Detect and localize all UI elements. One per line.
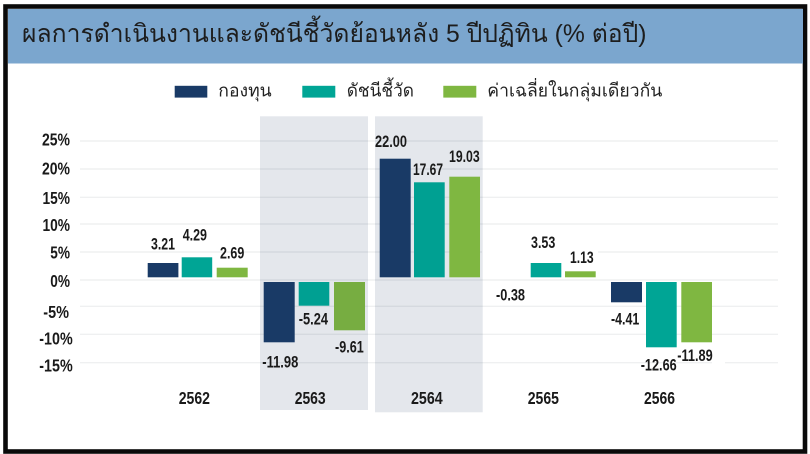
title: ผลการดำเนินงานและดัชนีชี้วัดย้อนหลัง 5 ปีปฏิทิน (% ต่อปี) (22, 15, 646, 48)
group 2564 (375, 133, 480, 408)
legend: peer average: ค่าเฉลี่ยในกลุ่มเดียวกัน (487, 78, 662, 102)
y axis labels (39, 130, 73, 376)
legend: fund: กองทุน (218, 81, 272, 102)
group 2566 (611, 282, 713, 408)
y axis labels: 20% (42, 158, 70, 178)
bars 2564 (380, 159, 480, 277)
y axis labels: -5% (43, 302, 69, 322)
bars 2565 (531, 263, 596, 277)
values 2566: -12.66 (641, 357, 677, 375)
y axis labels: 15% (42, 188, 70, 208)
legend: peer average (443, 78, 662, 102)
values 2565: -0.38 (496, 287, 525, 305)
values 2562 (151, 226, 244, 263)
year 2563: 2563 (295, 388, 326, 408)
year 2566: 2566 (644, 388, 675, 408)
values 2563: -9.61 (335, 339, 364, 357)
values 2562: 2.69 (220, 245, 244, 263)
highlight band 2564 (375, 116, 483, 412)
y axis labels: 25% (42, 130, 70, 150)
values 2563: -11.98 (262, 354, 298, 372)
values 2563 (262, 310, 364, 372)
legend: benchmark: ดัชนีชี้วัด (347, 78, 414, 101)
values 2564: 19.03 (449, 148, 480, 166)
values 2564 (375, 133, 480, 179)
grid lines (80, 141, 778, 363)
y axis labels: -15% (39, 356, 73, 376)
values 2564: 17.67 (413, 161, 443, 179)
group 2562 (148, 226, 248, 408)
values 2563: -5.24 (299, 310, 329, 328)
values 2566 (611, 310, 713, 375)
header band (8, 9, 803, 64)
values 2565: 1.13 (570, 249, 594, 267)
bars 2566 (611, 282, 712, 347)
y axis labels: 10% (42, 215, 70, 235)
highlight band 2563 (260, 116, 368, 410)
bars 2563 (264, 282, 365, 342)
year 2564: 2564 (411, 388, 443, 408)
bars 2562 (148, 257, 248, 277)
y axis labels: 5% (50, 242, 70, 262)
legend (175, 78, 662, 102)
values 2564: 22.00 (375, 133, 407, 151)
values 2562: 4.29 (183, 226, 207, 244)
values 2562: 3.21 (151, 235, 175, 253)
year 2565: 2565 (528, 388, 559, 408)
group 2563 (262, 282, 365, 408)
legend: fund (175, 81, 272, 102)
values 2566: -11.89 (677, 347, 713, 365)
group 2565 (496, 234, 596, 408)
year 2562: 2562 (179, 388, 210, 408)
values 2566: -4.41 (611, 310, 639, 328)
legend: benchmark (302, 78, 414, 101)
values 2565: 3.53 (531, 234, 555, 252)
y axis labels: 0% (50, 271, 70, 291)
values 2565 (496, 234, 594, 305)
y axis labels: -10% (39, 328, 73, 348)
